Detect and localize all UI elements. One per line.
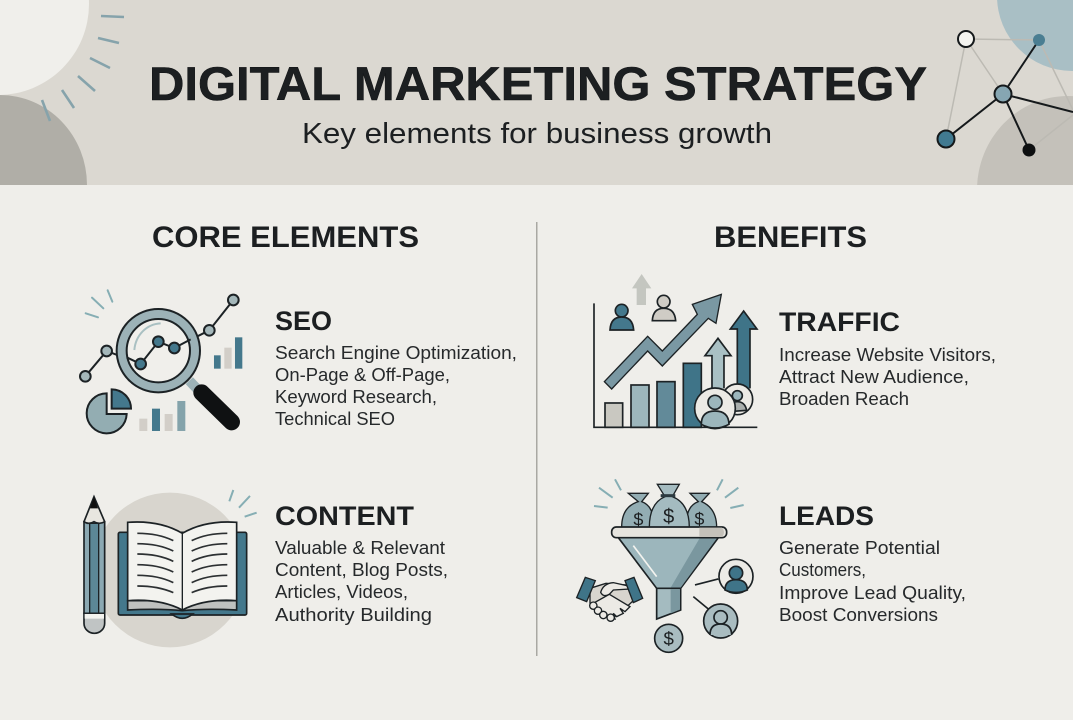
icon: content book and pencil [84, 490, 257, 647]
title: DIGITAL MARKETING STRATEGY [149, 57, 927, 110]
icon: leads funnel: $ [663, 628, 674, 649]
block: content text: Articles, Videos, [275, 581, 408, 602]
block: leads text: Customers, [779, 559, 866, 580]
block: leads text: Improve Lead Quality, [779, 582, 966, 603]
block: leads text: LEADS [779, 501, 874, 531]
block: SEO text: Technical SEO [275, 408, 395, 429]
decoration: sun and rays [0, 0, 124, 185]
block: traffic text [779, 307, 996, 409]
heading: core elements: CORE ELEMENTS [152, 221, 419, 254]
block: content text [275, 501, 448, 625]
divider [536, 222, 538, 656]
block: content text: Valuable & Relevant [275, 537, 445, 558]
block: traffic text: Broaden Reach [779, 388, 909, 409]
icon: leads funnel: $ [663, 506, 674, 528]
block: content text: Authority Building [275, 604, 432, 625]
block: SEO text: Search Engine Optimization, [275, 342, 517, 363]
block: SEO text [275, 306, 517, 429]
block: leads text [779, 501, 966, 625]
icon: SEO magnifier and charts [80, 290, 242, 433]
icon: leads funnel: $ [694, 509, 704, 529]
block: traffic text: Attract New Audience, [779, 366, 969, 387]
icon: handshake [577, 577, 643, 621]
block: traffic text: Increase Website Visitors, [779, 344, 996, 365]
subtitle: Key elements for business growth [302, 118, 772, 150]
icon: leads funnel: $ [633, 510, 643, 530]
icon: leads funnel [577, 479, 753, 652]
block: leads text: Generate Potential [779, 537, 940, 558]
block: leads text: Boost Conversions [779, 604, 938, 625]
header banner [0, 0, 1073, 185]
block: SEO text: SEO [275, 306, 332, 336]
block: content text: CONTENT [275, 501, 415, 531]
block: content text: Content, Blog Posts, [275, 559, 448, 580]
heading: benefits: BENEFITS [714, 221, 867, 254]
icon: traffic growth chart [594, 274, 757, 429]
decoration: network graph [936, 0, 1073, 185]
block: SEO text: Keyword Research, [275, 386, 437, 407]
block: traffic text: TRAFFIC [779, 307, 900, 337]
block: SEO text: On-Page & Off-Page, [275, 364, 450, 385]
